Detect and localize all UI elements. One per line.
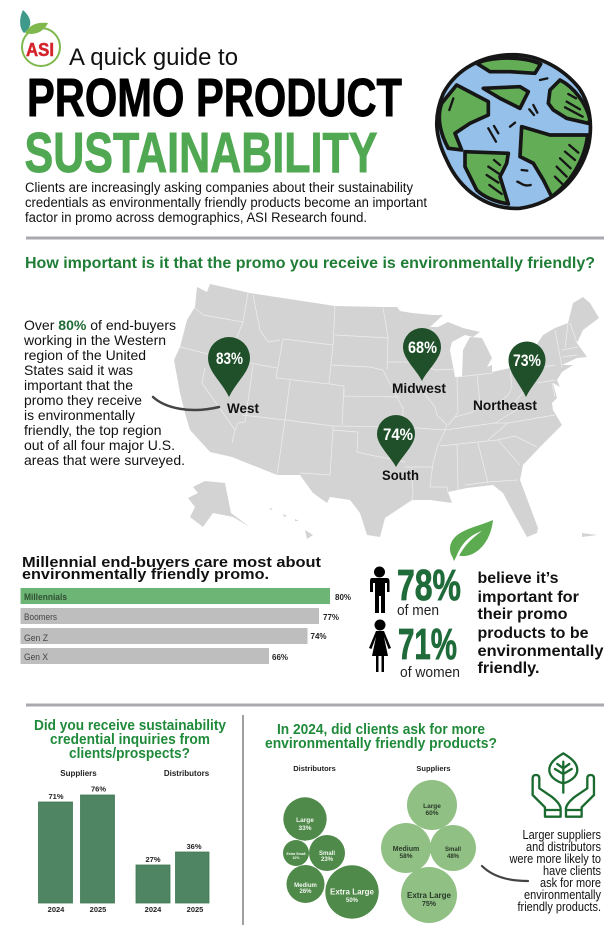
- bar chart: inquiries: 27%: [145, 855, 161, 864]
- icon: globe: [437, 55, 590, 208]
- bar chart: inquiries: Suppliers: [60, 769, 97, 778]
- stat: women 71%: of women: [400, 664, 460, 681]
- bar chart: generations: Millennials: [24, 592, 67, 603]
- pin: West 83%: 83%: [216, 349, 243, 368]
- bar chart: generations: 77%: [323, 613, 339, 622]
- bubble chart: distributors: Extra Large: [330, 888, 375, 896]
- callout text: larger suppliers: friendly products.: [518, 900, 601, 914]
- bubble chart: suppliers: 60%: [425, 810, 439, 817]
- heading: credential inquiries: credential inquiries from: [50, 731, 210, 748]
- bubble chart: suppliers: 58%: [399, 853, 413, 860]
- bar chart: inquiries: 71%: [48, 792, 64, 801]
- pin: Midwest 68%: [392, 328, 447, 396]
- title: A quick guide to: A quick guide to: [69, 44, 238, 71]
- bubble chart: distributors: Extra Small: [286, 852, 306, 856]
- callout text: West: working in the Western: [23, 332, 166, 348]
- map: United States: [174, 284, 599, 539]
- heading: Millennial: environmentally friendly promo.: [22, 567, 269, 583]
- callout text: larger suppliers: [509, 828, 602, 914]
- logo: ASI with leaves: [20, 10, 60, 66]
- stat: men 78%: [397, 561, 461, 619]
- divider: [26, 704, 604, 706]
- text: belief statement: [478, 570, 604, 677]
- text: belief statement: products to be: [478, 625, 589, 642]
- bar chart: inquiries: 2024: [48, 905, 65, 914]
- bar chart: generations: 74%: [310, 632, 327, 641]
- intro text: factor in promo across demographics, ASI Research found.: [25, 210, 367, 225]
- divider: [26, 236, 604, 240]
- heading: credential inquiries: Did you receive sustainability: [34, 717, 227, 734]
- bar chart: inquiries: 2025: [90, 905, 106, 914]
- pin: Northeast 73%: [473, 342, 546, 413]
- stat: women 71%: [398, 620, 460, 681]
- bubble chart: suppliers: Suppliers: [416, 764, 451, 773]
- heading: credential inquiries: [34, 717, 227, 762]
- callout text: West: areas that were surveyed.: [24, 452, 185, 468]
- heading: 2024 question: In 2024, did clients ask for more: [277, 721, 485, 738]
- callout text: larger suppliers: ask for more: [540, 876, 601, 890]
- icon: leaf: [450, 520, 493, 561]
- bubble chart: suppliers: Medium: [393, 846, 419, 853]
- bubble chart: suppliers: [381, 764, 476, 923]
- bubble chart: distributors: [283, 764, 379, 919]
- callout text: larger suppliers: and distributors: [526, 840, 601, 854]
- bar chart: inquiries: [38, 769, 210, 914]
- text: belief statement: friendly.: [478, 660, 540, 677]
- bar chart: generations: Gen X: [24, 652, 49, 663]
- stat: women 71%: 71%: [398, 620, 457, 669]
- heading: 2024 question: environmentally friendly products?: [265, 735, 497, 752]
- heading: map question: How important is it that the promo you receive is environmentally friendly?: [25, 255, 595, 272]
- arrow: swoosh to West: [153, 397, 219, 410]
- callout text: West: [23, 317, 185, 468]
- bubble chart: distributors: Small: [319, 851, 335, 857]
- icon: man: [370, 566, 390, 613]
- callout text: larger suppliers: environmentally: [524, 888, 602, 902]
- bubble chart: distributors: Large: [296, 817, 314, 824]
- callout text: larger suppliers: were more likely to: [509, 852, 601, 866]
- heading: Millennial: Millennial end-buyers care most about: [22, 555, 321, 571]
- heading: Millennial: [22, 555, 321, 583]
- stat: men 78%: 78%: [397, 561, 461, 610]
- bubble chart: distributors: 10%: [292, 856, 300, 860]
- bubble chart: distributors: 50%: [346, 898, 359, 904]
- pin: South 74%: 74%: [383, 425, 413, 444]
- bubble chart: suppliers: Small: [445, 847, 461, 853]
- bar chart: generations: Gen Z: [24, 633, 48, 644]
- bar chart: inquiries: 76%: [91, 784, 106, 794]
- pin: Northeast 73%: 73%: [513, 351, 541, 370]
- icon: hands holding leaf: [533, 753, 594, 817]
- pin: West 83%: West: [227, 401, 259, 416]
- intro text: credentials as environmentally friendly products become an important: [25, 195, 427, 210]
- bar chart: generations: 80%: [335, 593, 351, 602]
- text: belief statement: environmentally: [478, 643, 604, 660]
- bar chart: generations: [20, 588, 351, 664]
- text: belief statement: their promo: [478, 606, 568, 623]
- pin: Midwest 68%: Midwest: [392, 381, 447, 396]
- callout text: West: out of all four major U.S.: [24, 437, 175, 453]
- pin: Midwest 68%: 68%: [408, 338, 437, 357]
- arrow: swoosh to bubbles: [482, 866, 528, 881]
- pin: West 83%: [208, 337, 259, 416]
- bar chart: inquiries: 36%: [186, 842, 202, 851]
- callout text: West: States said it was: [24, 362, 133, 378]
- bar chart: inquiries: Distributors: [164, 769, 210, 778]
- bubble chart: distributors: 26%: [299, 889, 312, 895]
- pin: Northeast 73%: Northeast: [473, 398, 538, 413]
- bubble chart: distributors: Distributors: [293, 764, 336, 773]
- bar chart: generations: 66%: [272, 653, 288, 662]
- callout text: West: region of the United: [24, 347, 146, 363]
- callout text: larger suppliers: Larger suppliers: [522, 828, 601, 842]
- text: belief statement: believe it’s: [478, 570, 559, 587]
- title: PROMO PRODUCT: PROMO PRODUCT: [27, 68, 402, 128]
- bar chart: inquiries: 2024: [145, 905, 162, 914]
- callout text: West: friendly, the top region: [24, 422, 162, 438]
- callout text: West: Over 80% of end-buyers: [24, 317, 176, 333]
- bubble chart: distributors: 23%: [321, 857, 334, 863]
- stat: men 78%: of men: [397, 602, 439, 619]
- heading: 2024 question: [265, 721, 497, 752]
- bar chart: inquiries: 2025: [187, 905, 203, 914]
- callout text: West: promo they receive: [24, 392, 142, 408]
- intro text: Clients are increasingly asking companies about their sustainability: [25, 180, 413, 195]
- pin: South 74%: South: [382, 468, 419, 483]
- bubble chart: suppliers: Large: [423, 803, 441, 810]
- callout text: West: is environmentally: [24, 407, 135, 423]
- bubble chart: suppliers: 75%: [422, 901, 437, 908]
- bubble chart: distributors: 33%: [298, 825, 312, 832]
- text: belief statement: important for: [478, 589, 579, 606]
- bubble chart: distributors: Medium: [294, 883, 317, 889]
- bar chart: generations: Boomers: [24, 612, 57, 623]
- bubble chart: suppliers: 48%: [447, 854, 460, 860]
- pin: South 74%: [377, 415, 419, 483]
- callout text: West: important that the: [24, 377, 133, 393]
- logo: ASI with leaves: ASI: [26, 40, 54, 60]
- icon: woman: [369, 620, 391, 672]
- bubble chart: suppliers: Extra Large: [407, 891, 452, 900]
- callout text: larger suppliers: have clients: [543, 864, 601, 878]
- heading: credential inquiries: clients/prospects?: [69, 745, 190, 762]
- title: SUSTAINABILITY: SUSTAINABILITY: [24, 121, 378, 185]
- intro text: [25, 180, 427, 225]
